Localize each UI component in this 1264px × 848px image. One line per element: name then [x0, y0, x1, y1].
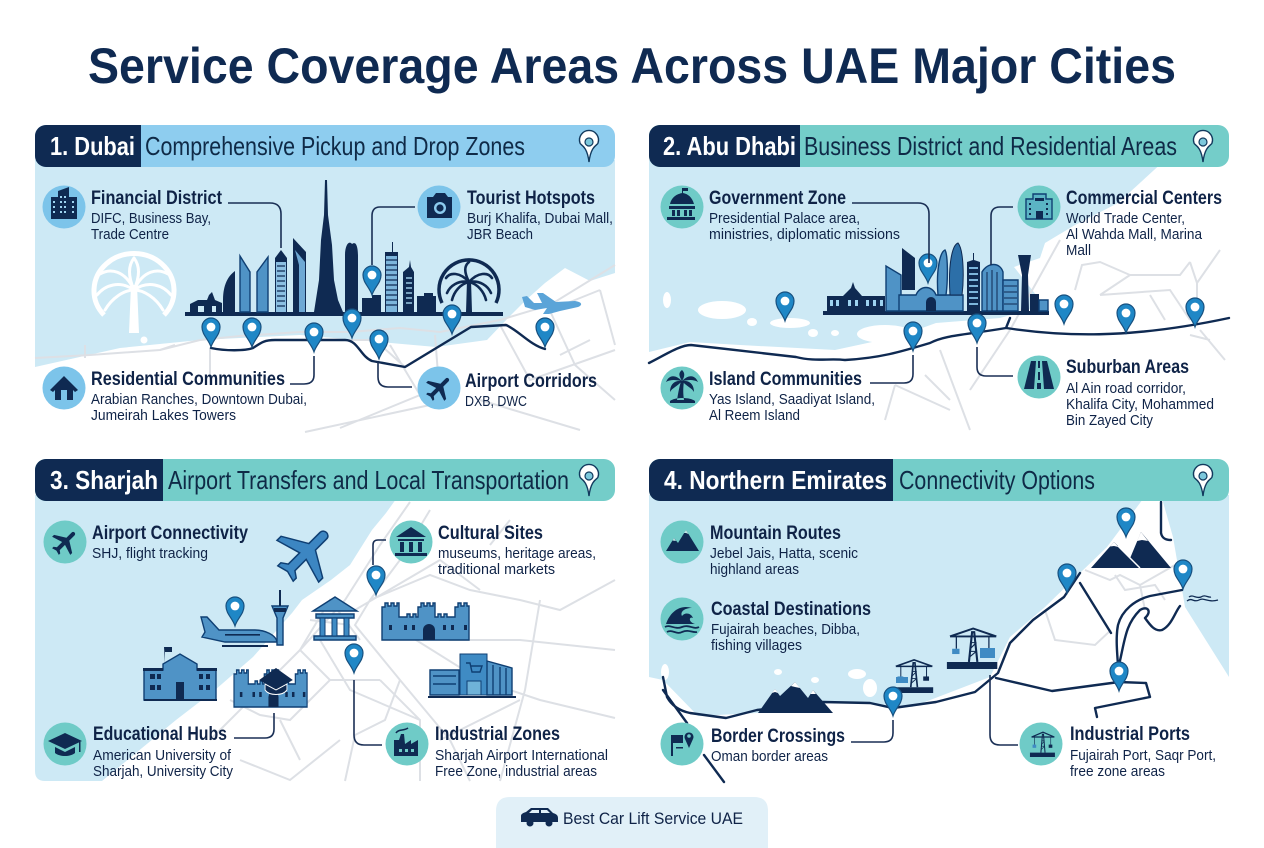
footer text: Best Car Lift Service UAE — [563, 810, 743, 828]
callout: Government Zone: Presidential Palace area, — [709, 211, 860, 227]
callout: Coastal Destinations — [660, 598, 871, 654]
icon: large plane — [265, 512, 347, 594]
callout: Industrial Ports: Fujairah Port, Saqr Port, — [1070, 748, 1216, 764]
callout: Coastal Destinations: Fujairah beaches, Dibba, — [711, 622, 860, 638]
callout: Industrial Ports: Industrial Ports — [1070, 724, 1190, 745]
callout: Commercial Centers: Commercial Centers — [1066, 188, 1222, 209]
map pins: Northern Emirates — [884, 508, 1192, 716]
header: Sharjah — [35, 459, 615, 501]
callout: Industrial Zones: Free Zone, industrial areas — [435, 764, 597, 780]
icon: waves — [1187, 596, 1218, 601]
header: Abu Dhabi: 2. Abu Dhabi — [663, 131, 796, 161]
icon: castle with cap — [234, 668, 307, 707]
callout: Island Communities: Island Communities — [709, 369, 862, 390]
callout: Coastal Destinations: Coastal Destinations — [711, 599, 871, 620]
callout: Island Communities: Yas Island, Saadiyat Island, — [709, 392, 875, 408]
callout: Suburban Areas: Khalifa City, Mohammed — [1066, 397, 1214, 413]
icon: shopping mall — [428, 654, 516, 698]
callout: Airport Connectivity: SHJ, flight tracking — [92, 546, 208, 562]
callout: Suburban Areas: Suburban Areas — [1066, 357, 1189, 378]
callout: Industrial Ports: free zone areas — [1070, 764, 1165, 780]
icon: light plane — [522, 293, 581, 314]
icon: southern mountains — [758, 682, 833, 713]
icon: car — [521, 808, 558, 826]
callout: Commercial Centers: Mall — [1066, 243, 1091, 259]
callout: Commercial Centers: Al Wahda Mall, Marina — [1066, 227, 1203, 243]
callout: Mountain Routes: Mountain Routes — [710, 523, 841, 544]
map: Abu Dhabi water and roads — [649, 160, 1225, 430]
title: Service Coverage Areas Across UAE Major Cities — [88, 38, 1176, 94]
callout: Financial District: DIFC, Business Bay, — [91, 211, 211, 227]
callout: Island Communities — [660, 355, 913, 424]
callout: Mountain Routes: Jebel Jais, Hatta, scenic — [710, 546, 858, 562]
callout: Commercial Centers — [991, 186, 1222, 265]
skyline: Dubai — [185, 180, 503, 316]
callout: Tourist Hotspots: Tourist Hotspots — [467, 188, 595, 209]
route: Northern Emirates roads — [663, 502, 1182, 782]
callout: Airport Corridors: DXB, DWC — [465, 394, 527, 410]
map pins: Sharjah — [226, 566, 385, 673]
icon: museum — [313, 597, 357, 640]
callout: Residential Communities: Residential Communities — [91, 369, 285, 390]
route: Abu Dhabi — [649, 318, 1229, 363]
icon: port cranes — [893, 629, 997, 693]
callout: Airport Connectivity — [44, 520, 248, 564]
header: Northern Emirates — [649, 459, 1229, 501]
callout: Cultural Sites: museums, heritage areas, — [438, 546, 596, 562]
map: Dubai water and roads — [35, 160, 615, 432]
callout: Government Zone: Government Zone — [709, 188, 846, 209]
callout: Suburban Areas — [977, 347, 1214, 429]
callout: Cultural Sites — [373, 520, 596, 578]
map pins: Dubai — [202, 266, 554, 359]
callout: Industrial Zones: Sharjah Airport International — [435, 748, 608, 764]
header: Dubai — [35, 125, 615, 167]
icon: white palm island — [94, 254, 174, 344]
callout: Island Communities: Al Reem Island — [709, 408, 800, 424]
callout: Commercial Centers: World Trade Center, — [1066, 211, 1185, 227]
callout: Mountain Routes — [660, 520, 858, 578]
callout: Industrial Zones: Industrial Zones — [435, 724, 560, 745]
callout: Educational Hubs: Sharjah, University City — [93, 764, 234, 780]
callout: Border Crossings: Border Crossings — [711, 726, 845, 747]
callout: Educational Hubs: Educational Hubs — [93, 724, 227, 745]
map: Northern Emirates water and roads — [649, 495, 1229, 716]
map pins: Abu Dhabi — [776, 254, 1204, 351]
callout: Government Zone — [660, 186, 929, 263]
conn: Northern Emirates connectors — [851, 675, 1018, 745]
header: Abu Dhabi: Business District and Residential Areas — [804, 131, 1177, 161]
callout: Residential Communities — [42, 356, 314, 424]
route: Dubai — [211, 325, 545, 367]
callout: Airport Corridors: Airport Corridors — [465, 371, 597, 392]
icon: heritage castle — [382, 603, 469, 640]
callout: Mountain Routes: highland areas — [710, 562, 799, 578]
header: Dubai: Comprehensive Pickup and Drop Zones — [145, 131, 525, 161]
callout: Tourist Hotspots: Burj Khalifa, Dubai Mall, — [467, 211, 613, 227]
callout: Government Zone: ministries, diplomatic missions — [709, 227, 900, 243]
panel: Sharjah — [35, 459, 615, 781]
callout: Residential Communities: Jumeirah Lakes Towers — [91, 408, 236, 424]
header: Dubai: 1. Dubai — [50, 131, 135, 161]
panel: Northern Emirates — [649, 459, 1229, 782]
callout: Financial District: Trade Centre — [91, 227, 169, 243]
callout: Border Crossings: Oman border areas — [711, 749, 828, 765]
callout: Industrial Ports — [1020, 722, 1216, 780]
callout: Educational Hubs: American University of — [93, 748, 232, 764]
callout: Border Crossings — [660, 722, 845, 766]
header: Northern Emirates: Connectivity Options — [899, 465, 1095, 495]
callout: Educational Hubs — [44, 713, 274, 780]
header: Sharjah: Airport Transfers and Local Transportation — [168, 465, 569, 495]
header: Northern Emirates: 4. Northern Emirates — [664, 465, 887, 495]
callout: Industrial Zones — [354, 680, 608, 780]
map: Sharjah water and roads — [35, 495, 615, 781]
panel: Abu Dhabi — [649, 125, 1229, 430]
callout: Financial District: Financial District — [91, 188, 223, 209]
panel: Dubai — [35, 125, 615, 432]
icon: university building — [143, 647, 217, 701]
footer badge — [496, 797, 768, 848]
callout: Coastal Destinations: fishing villages — [711, 638, 802, 654]
icon: northern mountains — [1091, 532, 1171, 568]
callout: Suburban Areas: Bin Zayed City — [1066, 413, 1154, 429]
callout: Tourist Hotspots: JBR Beach — [467, 227, 533, 243]
callout: Suburban Areas: Al Ain road corridor, — [1066, 381, 1186, 397]
callout: Cultural Sites: Cultural Sites — [438, 523, 543, 544]
header: Abu Dhabi — [649, 125, 1229, 167]
icon: airport and tower — [201, 590, 288, 647]
callout: Cultural Sites: traditional markets — [438, 562, 555, 578]
callout: Financial District — [42, 186, 281, 248]
header: Sharjah: 3. Sharjah — [50, 465, 158, 495]
callout: Tourist Hotspots — [372, 186, 613, 265]
callout: Airport Connectivity: Airport Connectivity — [92, 523, 248, 544]
skyline: Abu Dhabi — [823, 243, 1049, 315]
callout: Airport Corridors — [378, 362, 597, 410]
callout: Residential Communities: Arabian Ranches, Downtown Dubai, — [91, 392, 307, 408]
